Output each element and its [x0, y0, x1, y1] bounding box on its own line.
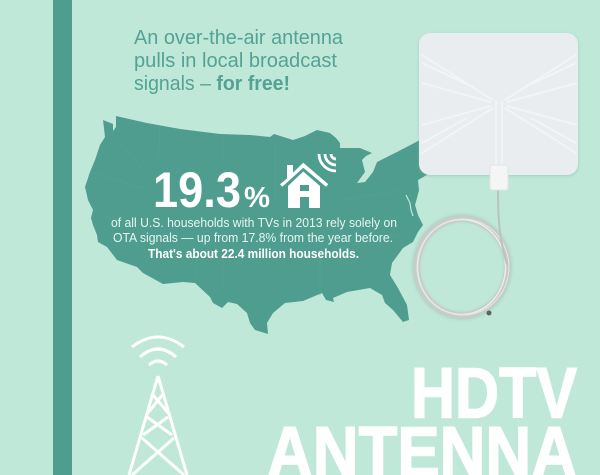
- antenna cable coil: [416, 190, 509, 316]
- heading: An over-the-air antenna: [134, 27, 344, 49]
- title: HDTV ANTENNA: HDTV: [411, 354, 577, 434]
- heading: pulls in local broadcast: [134, 50, 337, 72]
- stat description: That's about 22.4 million households.: [148, 247, 359, 261]
- map: United States: [85, 116, 432, 334]
- antenna connector: [490, 165, 508, 190]
- heading: [134, 27, 344, 95]
- antenna panel: [419, 34, 578, 176]
- heading: signals – for free!: [134, 73, 290, 95]
- stat: 19.3%: %: [244, 182, 270, 214]
- stat description: of all U.S. households with TVs in 2013 rely solely on: [111, 216, 397, 230]
- icon: house with signal: [280, 154, 336, 208]
- stat description: [111, 216, 397, 261]
- map: state borders: [90, 127, 400, 295]
- vertical stripe: [53, 0, 72, 475]
- antenna product: [416, 33, 578, 316]
- stat description: OTA signals — up from 17.8% from the year before.: [113, 231, 393, 245]
- stat: 19.3%: 19.3: [153, 162, 241, 218]
- icon: broadcast tower: [129, 337, 187, 475]
- title: HDTV ANTENNA: [267, 354, 577, 475]
- map: Chesapeake bay: [406, 195, 413, 216]
